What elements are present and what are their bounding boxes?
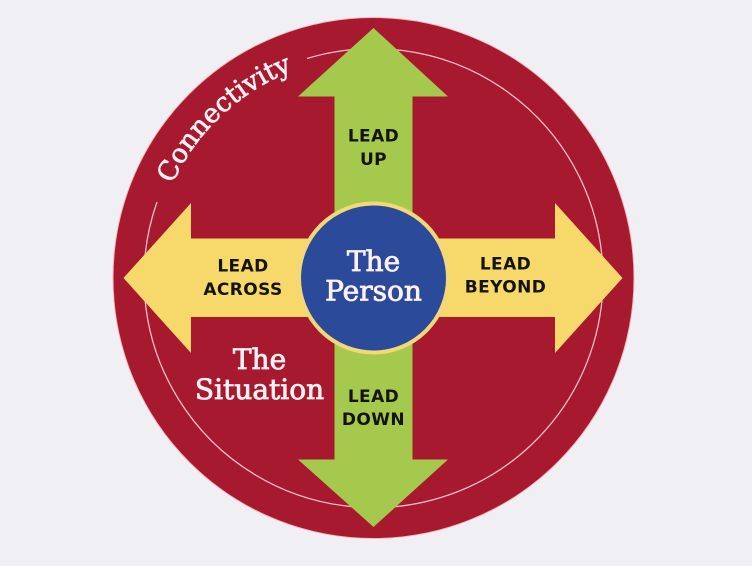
arrow: lead beyond xyxy=(436,203,622,353)
label: lead beyond: LEAD xyxy=(480,254,531,274)
label: the person: Person xyxy=(325,274,422,308)
label: lead beyond: BEYOND xyxy=(465,278,546,298)
label: lead down: LEAD xyxy=(348,387,399,407)
label: the situation: The xyxy=(233,343,286,376)
label: lead up: UP xyxy=(360,150,387,170)
label: lead up: LEAD xyxy=(348,126,399,146)
arrow: lead up xyxy=(298,28,448,220)
label: connectivity: Connectivity xyxy=(158,58,288,180)
arrow: lead across xyxy=(124,203,310,353)
label: the person: The xyxy=(347,245,400,278)
label: the situation: Situation xyxy=(195,373,324,406)
label: lead across: LEAD xyxy=(217,256,269,276)
label: lead down: DOWN xyxy=(342,410,405,430)
panel: the situation circle xyxy=(113,18,634,538)
center circle: the person xyxy=(299,204,448,352)
arrow: lead down xyxy=(298,340,448,527)
label: lead across: ACROSS xyxy=(203,280,283,300)
